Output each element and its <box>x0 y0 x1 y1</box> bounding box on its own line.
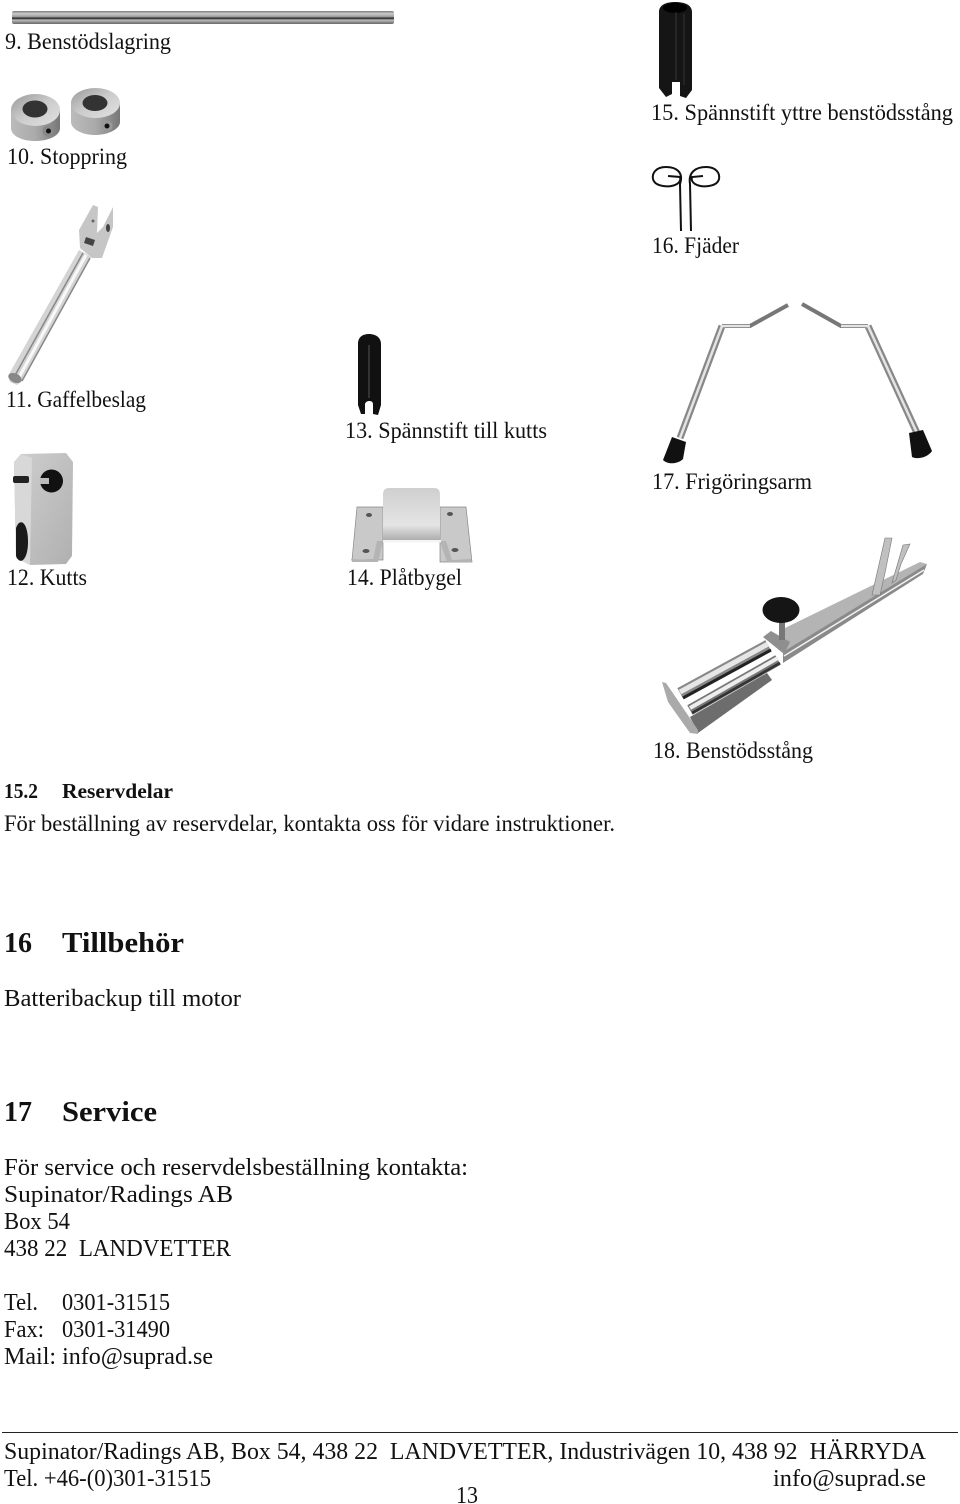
part 13: roll pin for coupling <box>358 334 381 415</box>
service contact block: 438 22 LANDVETTER <box>4 1236 231 1262</box>
section 16 heading: 16 <box>4 928 32 959</box>
footer: Supinator/Radings AB, Box 54, 438 22 LANDVETTER, Industrivägen 10, 438 92 HÄRRYDA <box>4 1439 927 1465</box>
service contact block: Fax: <box>4 1317 44 1343</box>
section 16 heading <box>4 928 184 959</box>
footer <box>4 1439 927 1504</box>
spare parts text: För beställning av reservdelar, kontakta oss för vidare instruktioner. <box>4 811 615 836</box>
service contact block <box>4 1155 468 1370</box>
service contact block: För service och reservdelsbeställning kontakta: <box>4 1155 468 1181</box>
label: 15. Spännstift yttre benstödsstång: 15. Spännstift yttre benstödsstång <box>651 100 953 125</box>
footer: Tel. +46-(0)301-31515 <box>4 1466 211 1492</box>
label: 9. Benstödslagring: 9. Benstödslagring <box>5 29 171 54</box>
footer: info@suprad.se <box>773 1466 926 1492</box>
label: 14. Plåtbygel: 14. Plåtbygel <box>347 565 462 590</box>
service contact block: 0301-31515 <box>62 1290 170 1316</box>
part 14: sheet metal bracket <box>351 488 472 562</box>
section 17 heading: 17 <box>4 1097 32 1128</box>
label: 16. Fjäder: 16. Fjäder <box>652 233 739 258</box>
label: 18. Benstödsstång: 18. Benstödsstång <box>653 738 813 763</box>
section 15.2 heading: Reservdelar <box>62 779 173 803</box>
part 15: outer roll pin <box>659 2 692 98</box>
part 10: stop rings <box>11 88 120 141</box>
section 17 heading: Service <box>62 1097 157 1128</box>
service contact block: Box 54 <box>4 1209 70 1235</box>
label: 11. Gaffelbeslag: 11. Gaffelbeslag <box>6 387 146 412</box>
part 9: bearing rod <box>12 11 394 24</box>
part 11: fork fitting <box>7 205 113 385</box>
service contact block: 0301-31490 <box>62 1317 170 1343</box>
part 17: release arms <box>663 304 932 463</box>
label: 17. Frigöringsarm: 17. Frigöringsarm <box>652 469 812 494</box>
service contact block: Supinator/Radings AB <box>4 1182 233 1208</box>
label: 10. Stoppring: 10. Stoppring <box>7 144 127 169</box>
label: 13. Spännstift till kutts: 13. Spännstift till kutts <box>345 418 547 443</box>
service contact block: Tel. <box>4 1290 38 1316</box>
section 17 heading <box>4 1097 157 1128</box>
section 15.2 heading: 15.2 <box>4 779 38 803</box>
section 16 heading: Tillbehör <box>62 928 184 959</box>
part 16: spring <box>653 167 719 231</box>
label: 12. Kutts: 12. Kutts <box>7 565 87 590</box>
accessories text: Batteribackup till motor <box>4 986 241 1012</box>
service contact block: Mail: info@suprad.se <box>4 1344 213 1370</box>
part 12: coupling block <box>13 453 73 565</box>
section 15.2 heading <box>4 779 173 803</box>
part 18: leg rest bar <box>662 538 927 734</box>
